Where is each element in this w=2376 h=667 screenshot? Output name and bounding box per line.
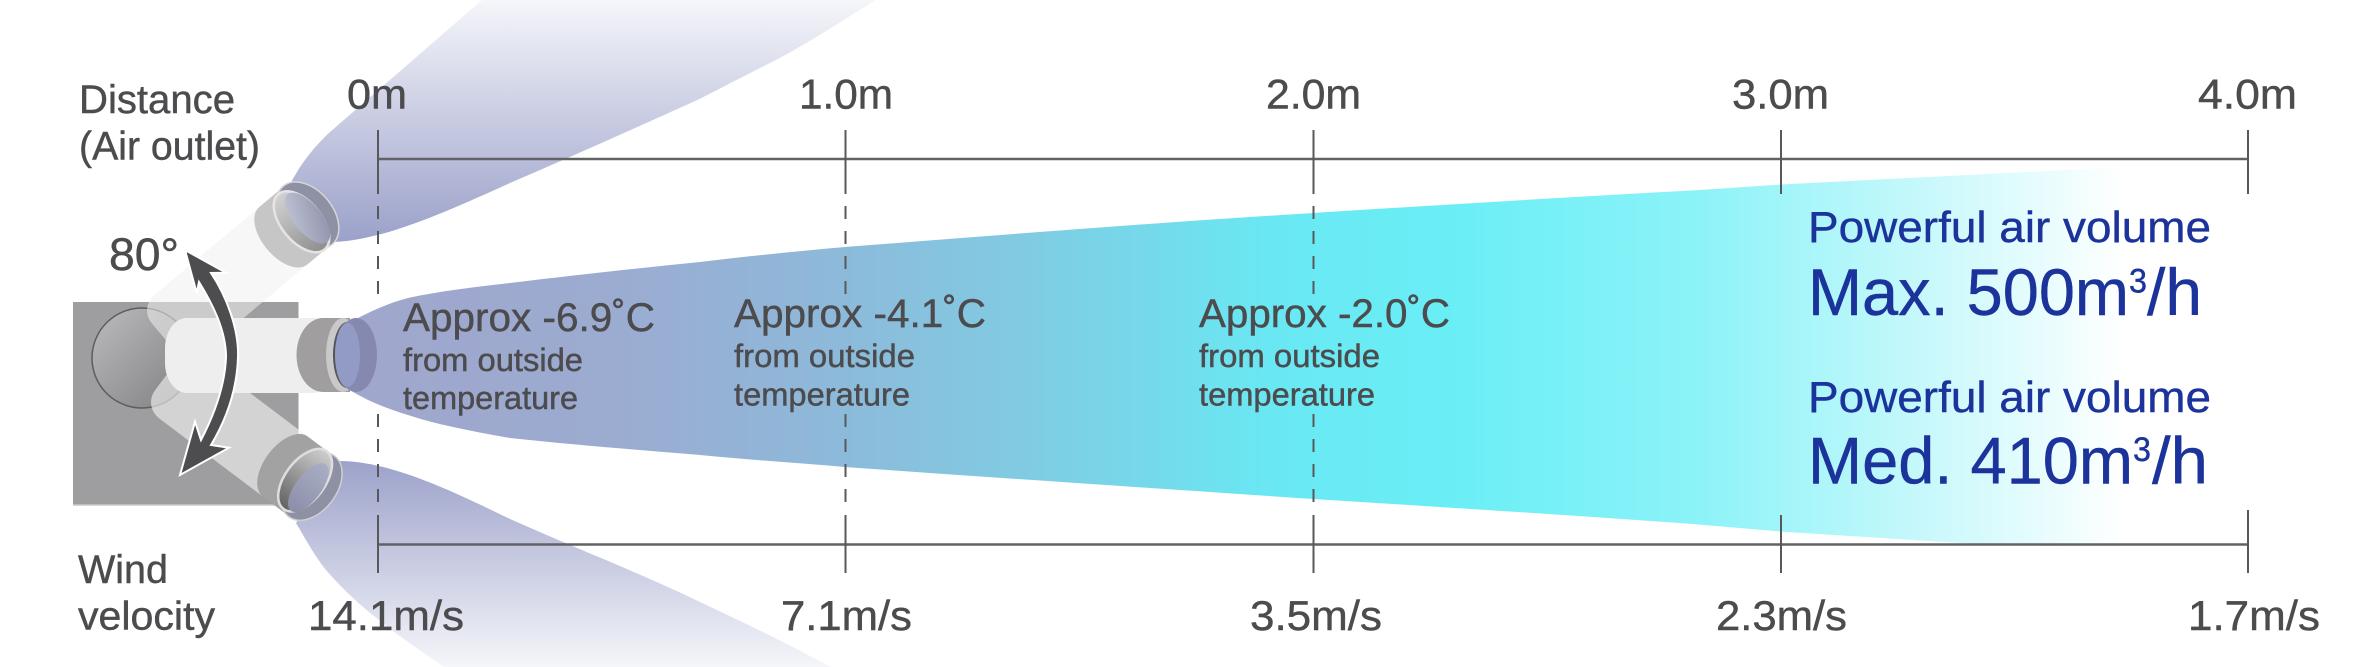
swing arrow [180,250,238,475]
heading: wind velocity: Wind [78,548,168,592]
central airflow fan [345,167,2125,548]
distance label 1.0m: 1.0m [799,70,893,118]
upper swivel position [139,170,351,366]
upper nozzle cup [243,185,334,278]
dashed guide lines [378,206,1314,502]
temperature note 1 [403,296,655,416]
temperature note 2: Approx -4.1˚C [734,292,986,336]
heading: distance: (Air outlet) [79,124,260,168]
heading: wind velocity: velocity [78,594,215,638]
lower nozzle opening [266,439,355,532]
callout: medium air volume [1808,373,2211,498]
velocity label 2.3: 2.3m/s [1716,592,1847,639]
callout: max air volume: 3 [2129,262,2147,300]
temperature note 3 [1199,292,1450,412]
heading: distance: Distance [79,78,235,122]
velocity label 3.5: 3.5m/s [1250,592,1382,639]
motor circle [92,308,192,408]
velocity label 1.7: 1.7m/s [2188,592,2320,639]
temperature note 2: temperature [734,376,910,412]
callout: medium air volume: /h [2152,424,2208,498]
device body [73,302,298,505]
callout: medium air volume: 3 [2133,431,2151,469]
callout: max air volume [1808,203,2211,329]
distance label 2.0m: 2.0m [1266,70,1361,118]
centre nozzle opening [326,318,377,392]
heading: distance [79,78,260,168]
centre tube [165,318,335,393]
upper airflow fan [285,0,876,242]
heading: wind velocity [78,548,215,638]
temperature note 3: from outside [1199,338,1380,374]
angle label: 80° [109,229,179,280]
velocity label 7.1: 7.1m/s [781,592,912,639]
upper tube [139,199,317,365]
temperature note 3: temperature [1199,376,1375,412]
upper nozzle opening [261,170,351,263]
callout: max air volume: Max. 500m [1808,255,2129,329]
distance label 0m: 0m [347,70,407,118]
lower tube [143,346,324,509]
centre nozzle cup [296,318,350,392]
wind velocity axis [308,510,2320,639]
lower airflow fan [296,461,831,667]
temperature note 2: from outside [734,338,915,374]
distance label 3.0m: 3.0m [1732,70,1829,118]
temperature note 1: temperature [403,380,578,416]
distance axis [347,70,2297,194]
distance label 4.0m: 4.0m [2198,70,2297,118]
temperature note 3: Approx -2.0˚C [1199,292,1450,336]
callout: medium air volume: Powerful air volume [1808,373,2211,422]
callout: medium air volume: Med. 410m [1808,424,2133,498]
lower swivel position [143,346,355,532]
callout: max air volume: Powerful air volume [1808,203,2211,252]
temperature note 1: Approx -6.9˚C [403,296,655,340]
callout: max air volume: /h [2147,255,2202,329]
lower nozzle cup [246,424,337,518]
temperature note 2 [734,292,986,412]
temperature note 1: from outside [403,342,583,378]
velocity label 14.1: 14.1m/s [308,592,464,639]
